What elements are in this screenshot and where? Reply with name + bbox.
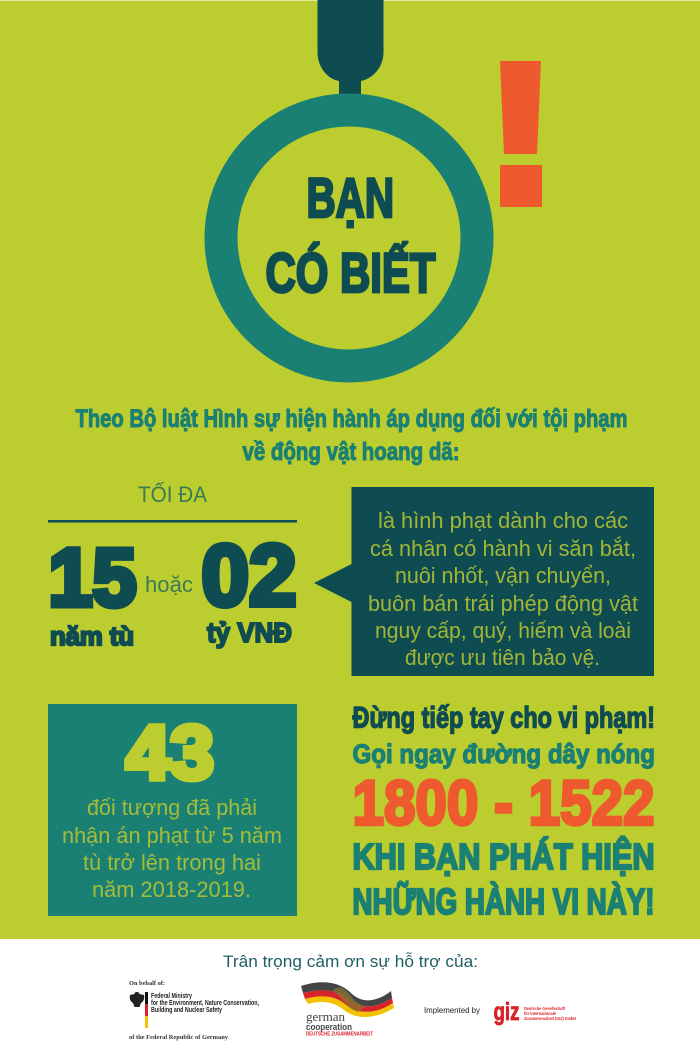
logo: German federal ministry: for the Environment, Nature Conservation,: [151, 1000, 259, 1007]
logo: GIZ: Deutsche Gesellschaft: [524, 1006, 565, 1011]
text: thanks: Trân trọng cảm ơn sự hỗ trợ của:: [223, 952, 478, 971]
logo: German federal ministry: Federal Ministry: [151, 993, 192, 1000]
title: BẠN: [306, 166, 394, 229]
text: offenders description: đối tượng đã phải: [87, 795, 257, 820]
callout: who the penalty applies to: [314, 487, 654, 676]
text: when you detect: KHI BẠN PHÁT HIỆN: [352, 835, 654, 877]
callout: who the penalty applies to: buôn bán trái phép động vật: [368, 591, 638, 616]
panel: hotline call to action: [352, 702, 655, 922]
label: maximum: TỐI ĐA: [138, 481, 207, 507]
text: offenders description: [62, 795, 282, 902]
logo: German federal ministry: of the Federal Republic of Germany: [129, 1034, 229, 1041]
panel: maximum penalty: [48, 481, 297, 651]
hotline number: 1800 - 1522: [352, 768, 654, 838]
logo: GIZ: giz: [494, 998, 520, 1026]
intro heading: [76, 405, 628, 466]
text: implemented by: Implemented by: [424, 1005, 481, 1015]
intro heading: về động vật hoang dã:: [242, 438, 460, 466]
text: offenders description: tù trở lên trong hai: [83, 850, 261, 875]
panel: 43 offenders: [48, 704, 297, 916]
stat: 15 years: năm tù: [50, 621, 134, 651]
logo: German federal ministry: On behalf of:: [129, 980, 165, 987]
text: offenders description: nhận án phạt từ 5 năm: [62, 823, 282, 848]
icon: exclamation mark: [500, 61, 542, 207]
logo: German cooperation: [301, 982, 394, 1038]
logo: German cooperation: german: [306, 1010, 346, 1024]
title: [266, 166, 436, 304]
logo: German cooperation: cooperation: [306, 1022, 352, 1033]
stat: 15 years: 15: [48, 532, 136, 624]
callout: who the penalty applies to: nguy cấp, quý, hiếm và loài: [375, 618, 631, 643]
logo: German cooperation: DEUTSCHE ZUSAMMENARBEIT: [306, 1032, 373, 1038]
logo: GIZ: Zusammenarbeit (GIZ) GmbH: [524, 1016, 577, 1021]
stat: 43: 43: [126, 710, 214, 796]
stat: 2 billion VND: 02: [202, 528, 296, 624]
text: or: hoặc: [145, 572, 193, 597]
logo: German federal ministry: [129, 980, 259, 1041]
logo: GIZ: [494, 998, 577, 1026]
stat: 2 billion VND: tỷ VNĐ: [207, 617, 292, 648]
callout: who the penalty applies to: cá nhân có hành vi săn bắt,: [370, 536, 636, 561]
callout: who the penalty applies to: nuôi nhốt, vận chuyển,: [395, 563, 611, 588]
title: CÓ BIẾT: [266, 241, 436, 304]
callout: who the penalty applies to: là hình phạt dành cho các: [378, 508, 628, 533]
panel: footer supporters: [0, 939, 700, 1050]
logo: GIZ: für Internationale: [524, 1011, 556, 1016]
callout: who the penalty applies to: được ưu tiên bảo vệ.: [405, 645, 600, 670]
heading: call hotline: Gọi ngay đường dây nóng: [352, 739, 655, 769]
logo: German federal ministry: Building and Nuclear Safety: [151, 1007, 222, 1014]
text: offenders description: năm 2018-2019.: [92, 877, 251, 902]
icon: magnifying glass: [221, 0, 477, 366]
